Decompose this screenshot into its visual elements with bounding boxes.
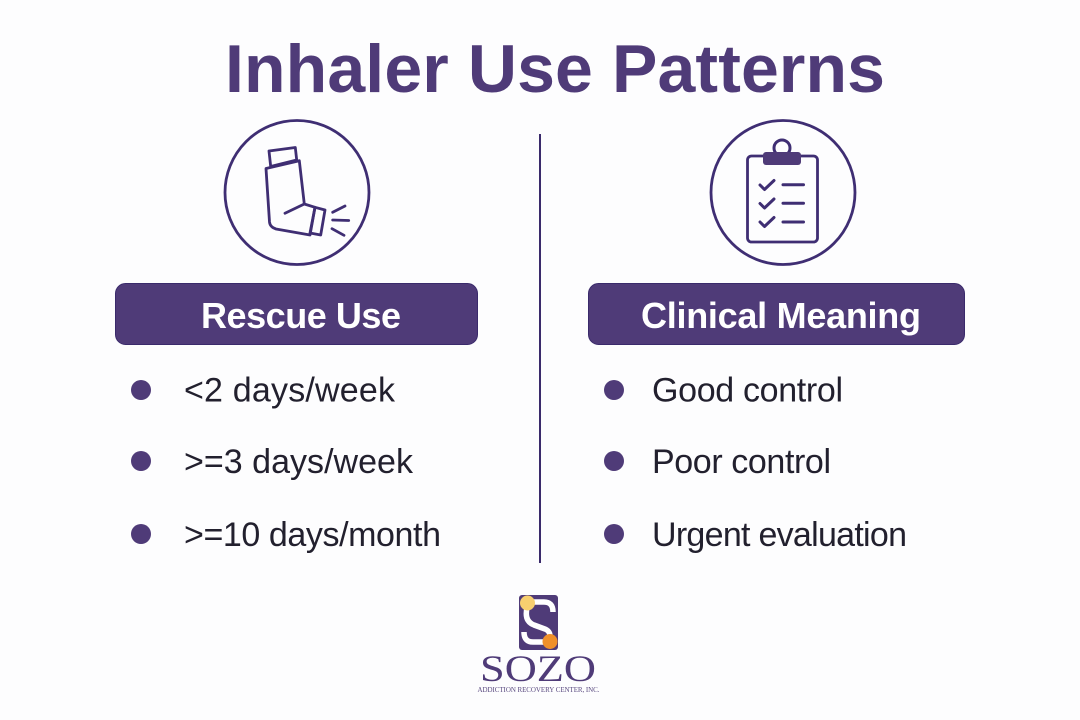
logo tagline: ADDICTION RECOVERY CENTER, INC. — [478, 686, 600, 694]
logo wordmark: SOZO — [480, 649, 596, 690]
list: clinical meanings: Urgent evaluation — [652, 516, 907, 554]
heading: rescue use — [116, 284, 478, 344]
heading: clinical meaning: Clinical Meaning — [641, 295, 921, 336]
title: Inhaler Use Patterns — [225, 31, 885, 107]
panel: rescue use — [116, 120, 478, 554]
icon: logo mark — [519, 595, 558, 650]
list: rescue use frequencies: <2 days/week — [184, 372, 396, 410]
list: clinical meanings: Good control — [652, 372, 843, 410]
panel: clinical meaning — [588, 120, 964, 554]
heading: rescue use: Rescue Use — [201, 295, 401, 336]
list: clinical meanings — [604, 372, 907, 554]
heading: clinical meaning — [588, 284, 964, 344]
list: rescue use frequencies — [131, 372, 441, 554]
icon: clipboard checklist — [711, 120, 855, 264]
list: rescue use frequencies: >=3 days/week — [184, 443, 414, 481]
list: clinical meanings: Poor control — [652, 443, 831, 481]
logo: sozo — [478, 595, 600, 694]
icon: inhaler — [225, 120, 369, 264]
list: rescue use frequencies: >=10 days/month — [184, 516, 441, 554]
